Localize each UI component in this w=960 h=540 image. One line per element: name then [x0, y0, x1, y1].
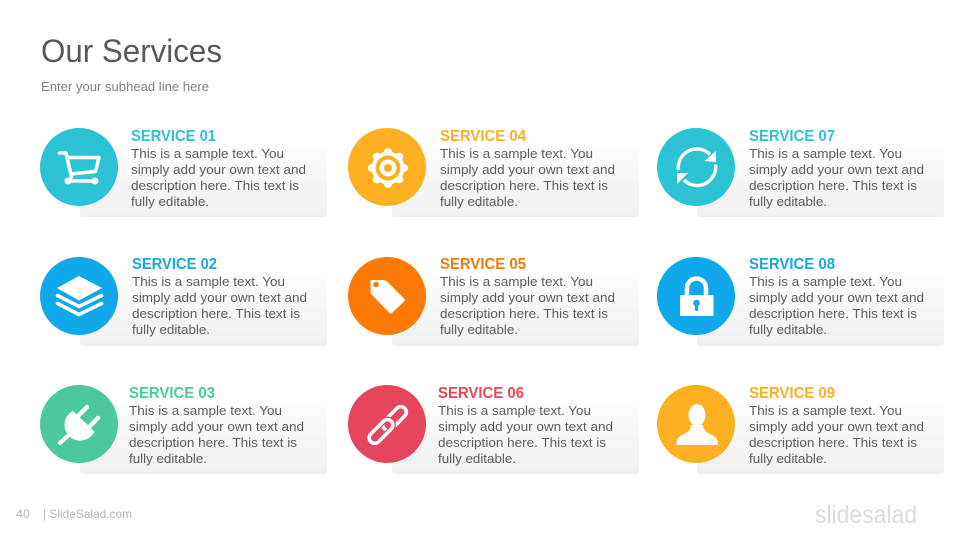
panel: service 07	[657, 128, 944, 217]
panel: service 03: SERVICE 03	[129, 385, 215, 402]
panel: service 02	[40, 256, 327, 346]
panel: service 05: This is a sample text. You	[440, 274, 593, 289]
panel: service 03: simply add your own text and	[129, 419, 304, 434]
panel: service 09: simply add your own text and	[749, 419, 924, 434]
panel: service 07: description here. This text is	[749, 178, 918, 193]
panel: service 05	[348, 256, 639, 346]
panel: service 01: This is a sample text. You	[131, 146, 284, 161]
panel: service 09	[657, 385, 944, 474]
panel: service 04: SERVICE 04	[440, 128, 526, 145]
footer: page number and site: | SlideSalad.com	[43, 507, 132, 521]
panel: service 06: description here. This text is	[438, 435, 607, 450]
panel: service 02: SERVICE 02	[132, 256, 217, 273]
panel: service 08: fully editable.	[749, 322, 827, 337]
panel: service 02: simply add your own text and	[132, 290, 307, 305]
panel: service 08: description here. This text is	[749, 306, 918, 321]
panel: service 06: This is a sample text. You	[438, 403, 591, 418]
panel: service 04: fully editable.	[440, 194, 518, 209]
panel: service 03: fully editable.	[129, 451, 207, 466]
panel: service 06: fully editable.	[438, 451, 516, 466]
panel: service 01: SERVICE 01	[131, 128, 216, 145]
panel: service 06: simply add your own text and	[438, 419, 613, 434]
subhead: Enter your subhead line here	[41, 79, 209, 94]
panel: service 06	[348, 385, 639, 474]
panel: service 07: This is a sample text. You	[749, 146, 902, 161]
panel: service 07: simply add your own text and	[749, 162, 924, 177]
panel: service 04	[348, 128, 639, 217]
footer: page number and site: 40	[16, 507, 30, 521]
panel: service 08	[657, 256, 944, 346]
panel: service 09: This is a sample text. You	[749, 403, 902, 418]
panel: service 06: SERVICE 06	[438, 385, 524, 402]
panel: service 05: description here. This text is	[440, 306, 609, 321]
panel: service 04: This is a sample text. You	[440, 146, 593, 161]
panel: service 02: This is a sample text. You	[132, 274, 285, 289]
panel: service 01	[40, 128, 327, 217]
panel: service 02: description here. This text is	[132, 306, 301, 321]
panel: service 04: description here. This text is	[440, 178, 609, 193]
panel: service 01: description here. This text is	[131, 178, 300, 193]
panel: service 01: simply add your own text and	[131, 162, 306, 177]
panel: service 08: This is a sample text. You	[749, 274, 902, 289]
panel: service 02: fully editable.	[132, 322, 210, 337]
icon: shopping cart	[60, 153, 99, 184]
panel: service 08: SERVICE 08	[749, 256, 835, 273]
icon: padlock	[680, 278, 714, 316]
panel: service 01: fully editable.	[131, 194, 209, 209]
icon: gear	[372, 152, 404, 184]
icon: price tag	[370, 280, 405, 314]
panel: service 08: simply add your own text and	[749, 290, 924, 305]
logo: slidesalad: slidesalad	[815, 501, 917, 529]
panel: service 05: simply add your own text and	[440, 290, 615, 305]
panel: service 03: description here. This text is	[129, 435, 298, 450]
icon: layers	[57, 276, 102, 314]
panel: service 07: fully editable.	[749, 194, 827, 209]
panel: service 09: SERVICE 09	[749, 385, 835, 402]
panel: service 05: SERVICE 05	[440, 256, 526, 273]
panel: service 04: simply add your own text and	[440, 162, 615, 177]
panel: service 05: fully editable.	[440, 322, 518, 337]
icon: chain link	[367, 404, 409, 446]
icon: plug	[60, 407, 98, 443]
panel: service 07: SERVICE 07	[749, 128, 835, 145]
panel: service 03	[40, 385, 327, 474]
icon: person	[676, 404, 718, 445]
icon: refresh arrows	[677, 149, 716, 186]
panel: service 03: This is a sample text. You	[129, 403, 282, 418]
panel: service 09: description here. This text is	[749, 435, 918, 450]
panel: service 09: fully editable.	[749, 451, 827, 466]
title: Our Services	[41, 33, 222, 69]
